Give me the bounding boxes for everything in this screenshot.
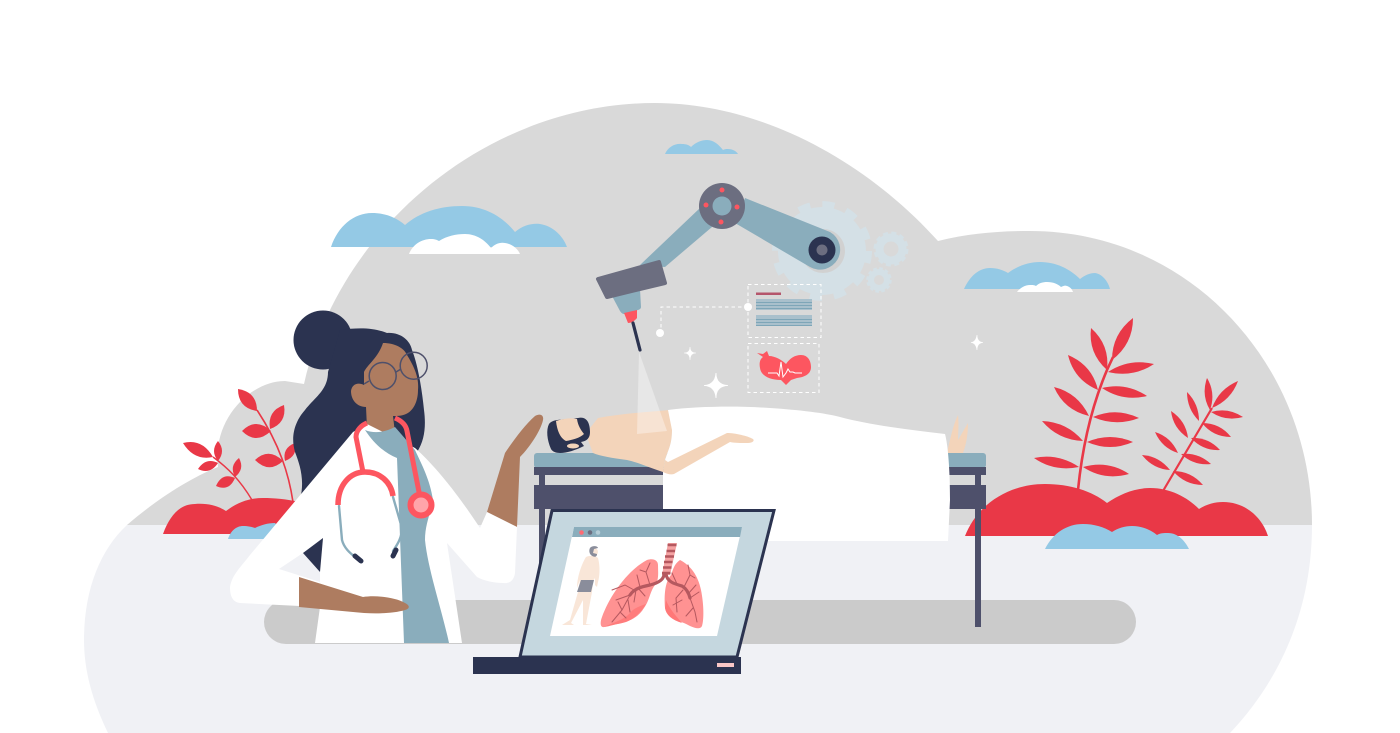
- dashed connector: [656, 303, 752, 337]
- patient: [547, 410, 968, 472]
- doctor face: [351, 343, 418, 436]
- laptop: [473, 510, 774, 674]
- laptop screen frame: [520, 510, 774, 657]
- doctor forearm: [299, 577, 409, 613]
- patient arm: [663, 433, 754, 474]
- doctor blue shirt: [365, 427, 449, 643]
- screen page: [550, 527, 742, 636]
- sparkles: [684, 335, 983, 398]
- doctor hair: [293, 310, 425, 500]
- gears: [776, 204, 907, 298]
- data card: [748, 284, 821, 338]
- lungs: [601, 543, 703, 628]
- right plant small: [1142, 378, 1243, 491]
- robot arm: [598, 183, 845, 350]
- cloud: right: [964, 262, 1110, 292]
- background: floor: [84, 525, 1312, 733]
- right bush red: [965, 484, 1268, 536]
- heart monitor card: [748, 344, 819, 392]
- coat inner fold: [279, 538, 323, 582]
- doctor raised arm: [487, 415, 543, 527]
- bed sheet: [663, 407, 950, 541]
- patient torso: [588, 410, 672, 472]
- left plants: [183, 389, 296, 502]
- lab coat: [230, 424, 517, 643]
- cloud: upper left: [331, 206, 567, 254]
- glasses: [364, 352, 427, 390]
- background: gray hill shape: [127, 103, 1312, 525]
- stethoscope: [338, 418, 432, 561]
- scan light beam: [637, 352, 667, 434]
- right lung: [665, 560, 703, 628]
- patient head and beard: [547, 418, 590, 453]
- floor shadow strip: [264, 600, 1136, 644]
- laptop base: [473, 657, 741, 674]
- cloud: top centre: [665, 140, 738, 154]
- examination table: [534, 453, 986, 627]
- left bush red: [163, 498, 300, 534]
- screen title bar: [572, 527, 742, 537]
- bronchi: [612, 563, 699, 622]
- doctor: [230, 310, 543, 643]
- left lung: [601, 559, 658, 627]
- left bush blue: [228, 523, 290, 539]
- right bush blue: [1045, 524, 1189, 549]
- right plant large: [1034, 318, 1154, 490]
- patient feet: [947, 415, 968, 453]
- small man figure: [562, 546, 600, 625]
- trachea: [662, 543, 677, 575]
